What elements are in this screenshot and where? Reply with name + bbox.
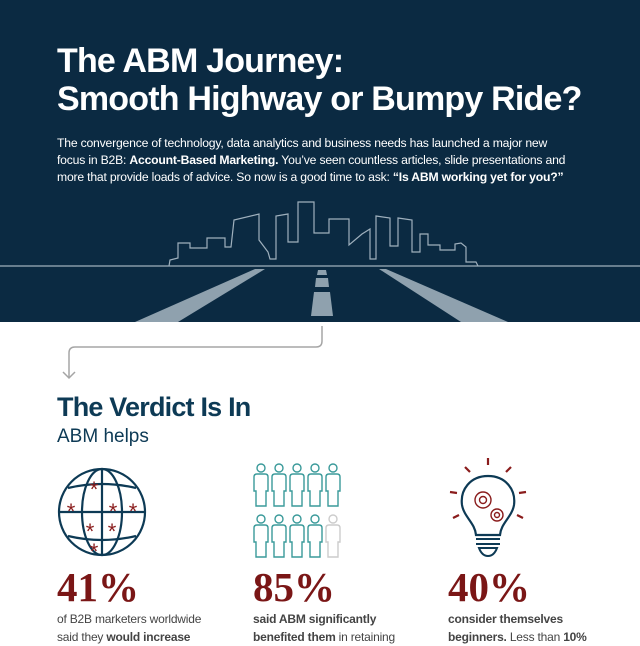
intro text: focus in B2B: Account-Based Marketing. You’ve seen countless articles, slide presentations and bbox=[57, 153, 565, 167]
icon: globe bbox=[58, 468, 146, 558]
stat: 85%: 85% bbox=[253, 564, 335, 610]
intro text bbox=[57, 136, 565, 184]
icon: globe: * bbox=[108, 519, 117, 544]
stat: 40%: consider themselves bbox=[448, 612, 563, 626]
title: Smooth Highway or Bumpy Ride? bbox=[57, 80, 582, 118]
title bbox=[57, 42, 582, 118]
icon: globe: * bbox=[86, 519, 95, 544]
stat: 85%: benefited them in retaining bbox=[253, 630, 395, 644]
arrow: connector bbox=[62, 326, 323, 379]
stat: 40%: beginners. Less than 10% bbox=[448, 630, 587, 644]
stat: 85%: said ABM significantly bbox=[253, 612, 376, 626]
illustration: skyline and road bbox=[0, 201, 640, 322]
icon: people grid bbox=[253, 463, 341, 558]
subheading: ABM helps bbox=[57, 426, 149, 447]
stat: 40%: 40% bbox=[448, 564, 530, 610]
section heading: The Verdict Is In bbox=[57, 392, 250, 422]
stat: 85% bbox=[253, 564, 395, 644]
icon: globe: * bbox=[129, 499, 138, 524]
intro text: more that provide loads of advice. So now is a good time to ask: “Is ABM working yet for you?” bbox=[57, 170, 563, 184]
stat: 41%: of B2B marketers worldwide bbox=[57, 612, 201, 626]
stat: 41% bbox=[57, 564, 201, 644]
stat: 41%: 41% bbox=[57, 564, 139, 610]
title: The ABM Journey: bbox=[57, 42, 343, 80]
header panel bbox=[0, 0, 640, 322]
icon: globe: * bbox=[109, 499, 118, 524]
icon: globe: * bbox=[90, 477, 99, 502]
stat: 40% bbox=[448, 564, 587, 644]
icon: globe: * bbox=[67, 499, 76, 524]
stat: 41%: said they would increase bbox=[57, 630, 190, 644]
icon: lightbulb bbox=[450, 458, 526, 557]
intro text: The convergence of technology, data analytics and business needs has launched a major new bbox=[57, 136, 547, 150]
